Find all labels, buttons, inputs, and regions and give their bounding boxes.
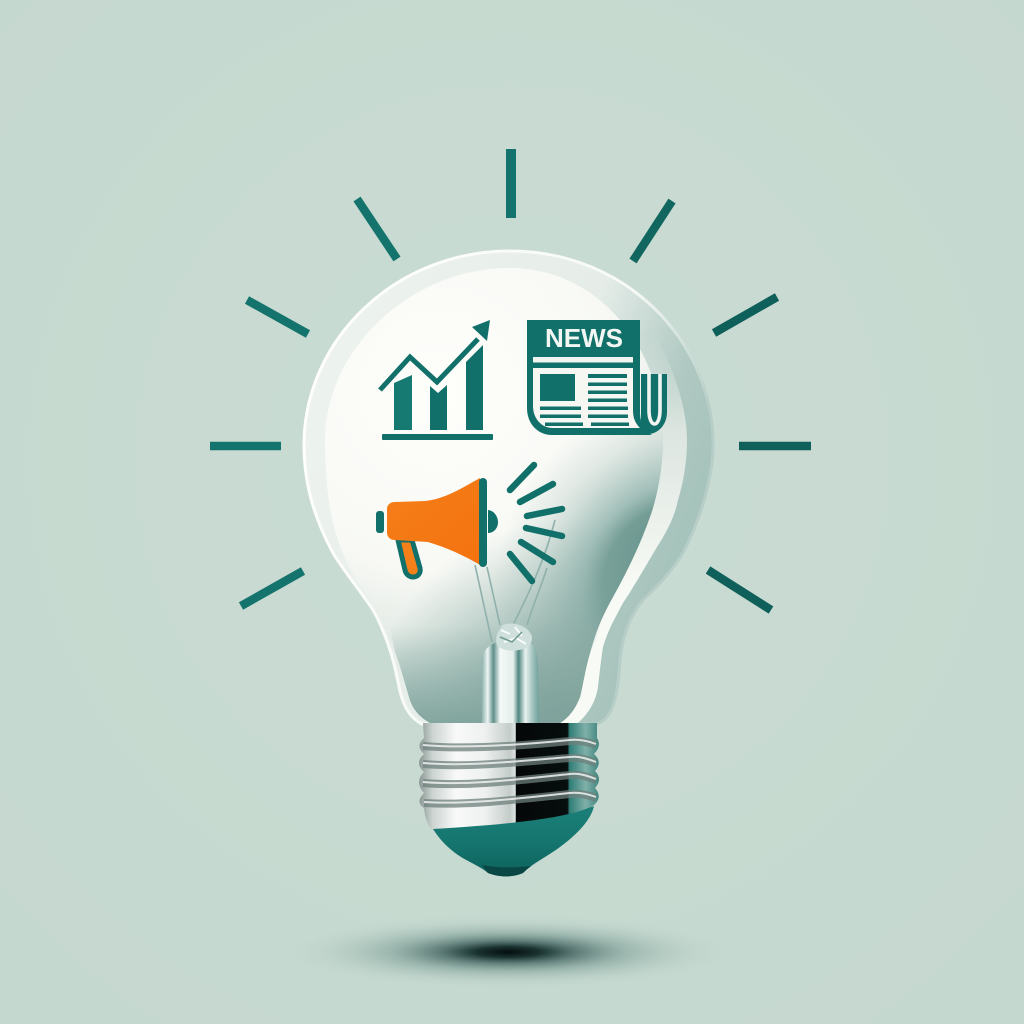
newspaper body — [527, 320, 652, 435]
bulb outer glass — [304, 251, 713, 724]
inner glass bottom shading — [390, 625, 603, 723]
thread ridges — [423, 740, 596, 804]
light rays — [210, 149, 811, 610]
glass stem — [482, 623, 539, 723]
newspaper roll — [640, 374, 667, 434]
filament wires — [475, 520, 555, 642]
screw base — [419, 723, 599, 832]
teal cap — [433, 806, 594, 876]
icon: newspaper — [527, 320, 667, 435]
inner glass lower shading — [325, 268, 663, 723]
white highlight stripe — [560, 335, 687, 723]
icon: growth chart — [380, 320, 493, 440]
sound waves — [510, 465, 562, 581]
ground shadow — [276, 914, 740, 990]
newspaper headline: NEWS — [545, 323, 623, 353]
inner glass right shading — [325, 268, 663, 723]
light bulb — [304, 251, 713, 876]
bulb inner glass — [325, 268, 663, 723]
icon: megaphone — [376, 465, 562, 581]
